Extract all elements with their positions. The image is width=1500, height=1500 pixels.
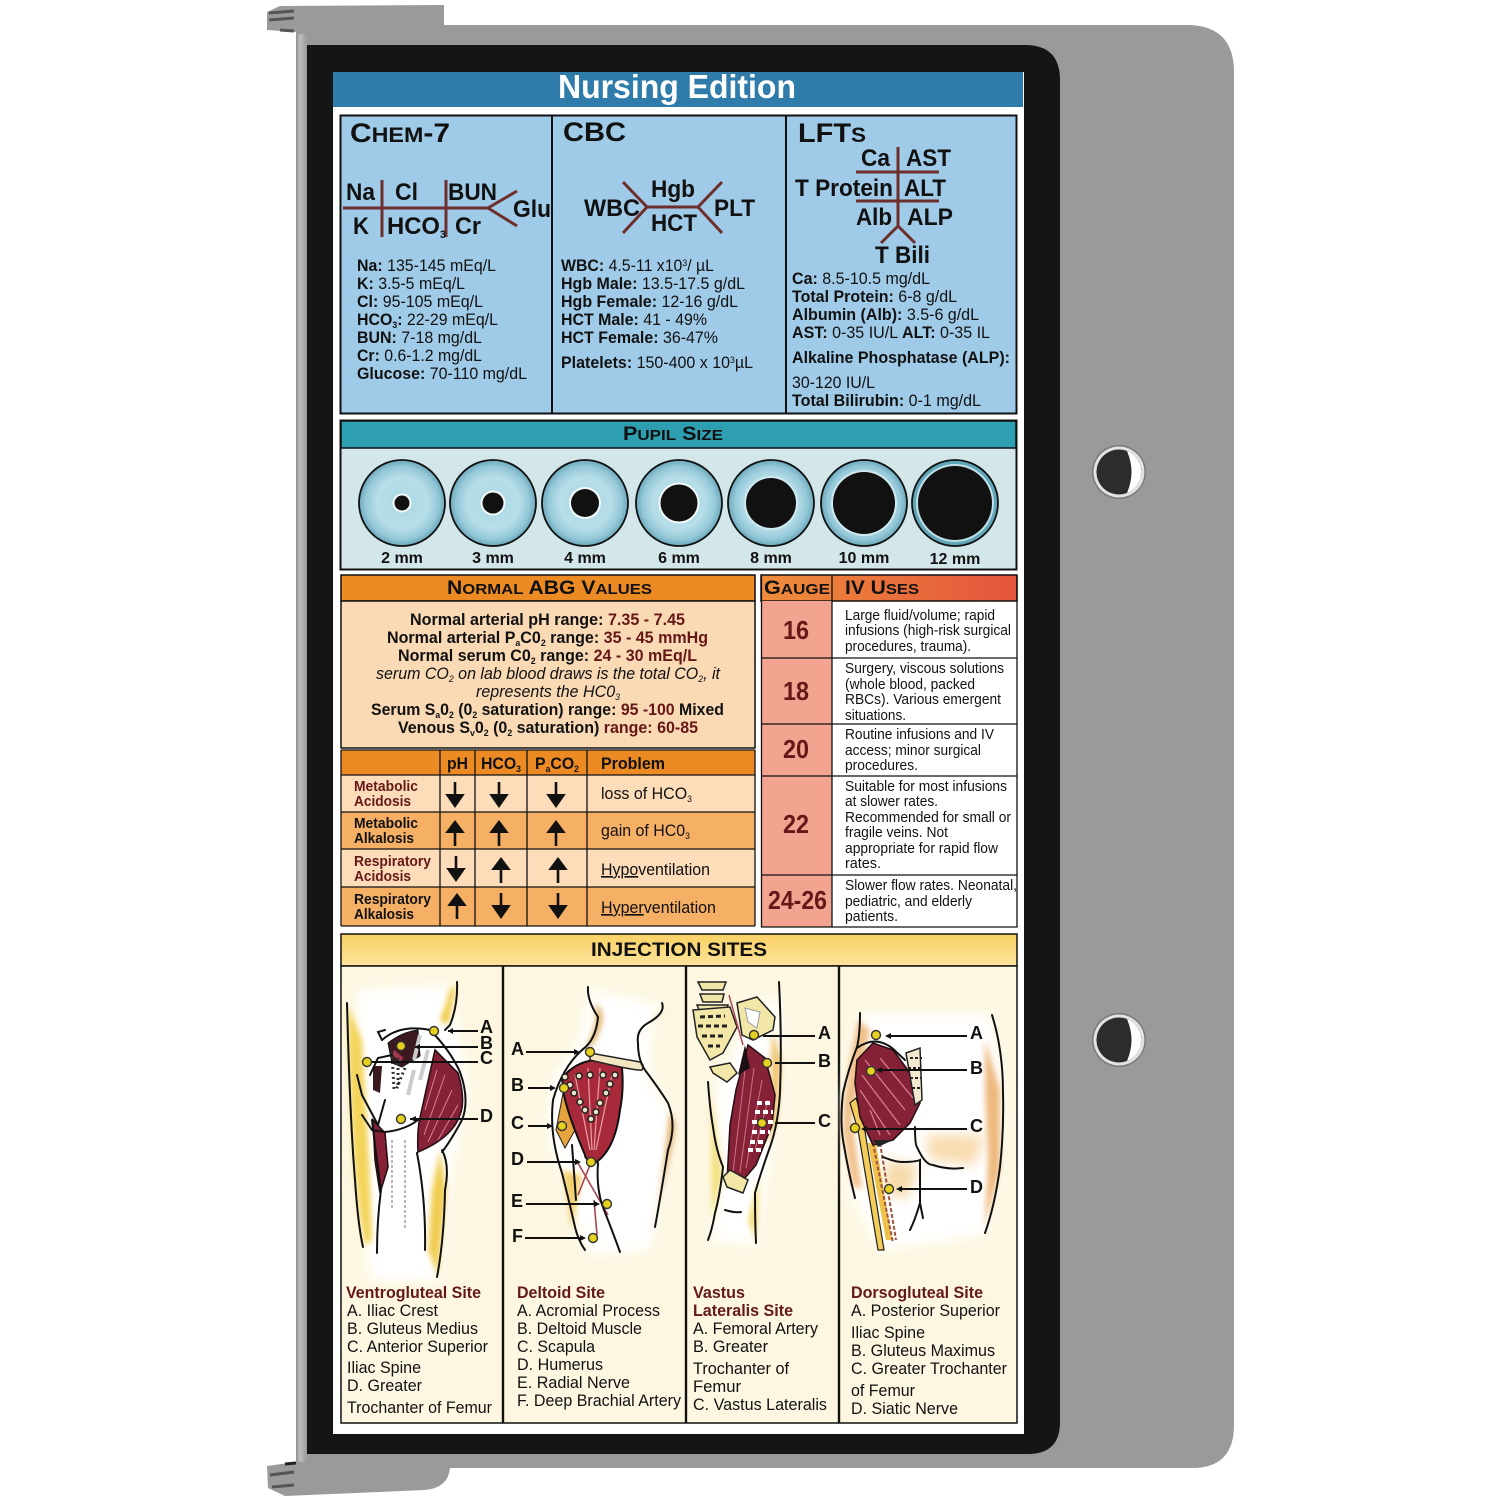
panel: chem-7 — [343, 118, 551, 383]
gauge row 18: Surgery, viscous solutions — [845, 660, 1004, 677]
abg reference text: Normal serum C0 — [398, 647, 535, 665]
gauge row 18: (whole blood, packed — [845, 676, 975, 693]
panel: normal abg values — [341, 575, 755, 926]
panel: chem-7: BUN — [448, 179, 497, 206]
abg table: HCO — [481, 755, 518, 773]
legend: deltoid site — [517, 1283, 681, 1410]
abg reference text: 0 — [440, 701, 449, 719]
panel: gauge and iv uses — [761, 575, 1017, 927]
row: respiratory alkalosis: Alkalosis — [354, 906, 414, 923]
panel: normal abg values: NORMAL ABG V ALUES — [447, 578, 652, 599]
abg reference text: 2 — [507, 728, 512, 738]
row: respiratory acidosis: Hypoventilation — [601, 861, 710, 879]
legend: deltoid site: F. Deep Brachial Artery — [517, 1391, 681, 1410]
illustration: dorsogluteal: D — [970, 1177, 983, 1197]
pupil 6 mm — [636, 460, 722, 567]
panel: cbc: µL — [735, 354, 753, 372]
legend: dorsogluteal site: Iliac Spine — [851, 1323, 925, 1342]
illustration: deltoid — [511, 987, 675, 1255]
legend: vastus lateralis site: Vastus — [693, 1283, 745, 1302]
gauge row 18: RBCs). Various emergent — [845, 691, 1002, 708]
abg reference text: 2 — [531, 656, 536, 666]
pupil 12 mm: 12 mm — [930, 551, 980, 568]
gauge row 16: infusions (high-risk surgical — [845, 622, 1011, 639]
illustration: dorsogluteal: C — [970, 1116, 983, 1136]
row: respiratory alkalosis: Hyperventilation — [601, 899, 716, 917]
panel: lfts: ALP — [907, 204, 953, 231]
illustration: vastus lateralis: A — [818, 1023, 831, 1043]
row: respiratory acidosis: Acidosis — [354, 868, 411, 885]
gauge row 24-26: patients. — [845, 908, 898, 925]
panel: cbc — [561, 117, 755, 372]
panel: chem-7: Glucose: 70-110 mg/dL — [357, 365, 527, 383]
abg reference text: Serum S — [371, 701, 438, 719]
abg reference text: a — [515, 638, 521, 648]
abg table: Problem — [601, 755, 665, 773]
abg reference text: Normal arterial P — [387, 629, 519, 647]
legend: deltoid site: Deltoid Site — [517, 1283, 605, 1302]
row: metabolic acidosis — [354, 778, 692, 810]
abg reference text: (0 — [454, 701, 472, 719]
legend: deltoid site: A. Acromial Process — [517, 1301, 660, 1320]
gauge row 16: 16 — [783, 615, 809, 645]
row: metabolic alkalosis — [354, 815, 690, 847]
pupil 2 mm — [359, 460, 445, 567]
panel: cbc: HCT — [651, 210, 697, 237]
panel: cbc: Hgb — [651, 176, 695, 203]
abg reference text: (0 — [489, 719, 507, 737]
illustration: ventrogluteal: C — [480, 1048, 493, 1068]
illustration: vastus lateralis: C — [818, 1111, 831, 1131]
panel: lfts: ALT — [904, 175, 946, 202]
abg reference text — [371, 611, 724, 738]
pupil 4 mm: 4 mm — [564, 550, 606, 567]
abg reference text: 2 — [484, 728, 489, 738]
legend: deltoid site: C. Scapula — [517, 1337, 595, 1356]
illustration: ventrogluteal — [347, 982, 493, 1280]
row: metabolic alkalosis: gain of HC0 — [601, 822, 688, 840]
illustration: ventrogluteal: D — [480, 1106, 493, 1126]
panel: cbc: 3 — [682, 258, 687, 268]
panel: cbc: Hgb Male: 13.5-17.5 g/dL — [561, 275, 745, 293]
panel: chem-7: Na: 135-145 mEq/L — [357, 257, 496, 275]
legend: dorsogluteal site: B. Gluteus Maximus — [851, 1341, 995, 1360]
legend: vastus lateralis site: Trochanter of — [693, 1359, 789, 1378]
panel: lfts: Total Protein: 6-8 g/dL — [792, 288, 957, 306]
legend: vastus lateralis site: Lateralis Site — [693, 1301, 793, 1320]
panel: labs — [340, 115, 1016, 414]
legend: dorsogluteal site: Dorsogluteal Site — [851, 1283, 983, 1302]
illustration: deltoid: D — [511, 1149, 524, 1169]
abg reference text: Normal arterial pH range: 7.35 - 7.45 — [410, 611, 685, 629]
abg table: pH — [447, 755, 468, 773]
pupil 4 mm — [542, 460, 628, 567]
legend: deltoid site: E. Radial Nerve — [517, 1373, 630, 1392]
panel: chem-7: HCO — [387, 213, 440, 240]
gauge row 22: Suitable for most infusions — [845, 778, 1007, 795]
abg reference text: 2 — [541, 638, 546, 648]
legend: ventrogluteal site: D. Greater — [347, 1376, 422, 1395]
abg reference text: 35 - 45 mmHg — [604, 629, 708, 647]
illustration: deltoid: F — [512, 1226, 523, 1246]
legend: vastus lateralis site — [693, 1283, 827, 1414]
panel: cbc: PLT — [714, 195, 755, 222]
abg reference text: , it — [703, 665, 721, 683]
gauge row 20 — [783, 726, 994, 774]
panel: lfts: Albumin (Alb): 3.5-6 g/dL — [792, 306, 979, 324]
abg table: a — [546, 764, 551, 774]
panel: lfts: AST — [906, 145, 951, 172]
black card frame — [307, 45, 1060, 1454]
legend: ventrogluteal site — [346, 1283, 492, 1417]
panel: lfts — [792, 118, 1010, 410]
row: metabolic alkalosis: 3 — [685, 831, 690, 841]
legend: deltoid site: B. Deltoid Muscle — [517, 1319, 642, 1338]
gauge row 16: procedures, trauma). — [845, 638, 971, 655]
panel: cbc: WBC: 4.5-11 x10 — [561, 257, 686, 275]
abg reference text: Venous S — [398, 719, 472, 737]
legend: dorsogluteal site: D. Siatic Nerve — [851, 1399, 958, 1418]
legend: ventrogluteal site: B. Gluteus Medius — [347, 1319, 478, 1338]
gauge row 16: Large fluid/volume; rapid — [845, 607, 995, 624]
gauge row 20: 20 — [783, 734, 809, 764]
panel: chem-7: 22-29 mEq/L — [407, 311, 502, 329]
row: respiratory alkalosis — [354, 891, 716, 923]
row: respiratory acidosis: Respiratory — [354, 853, 432, 870]
panel: cbc: HCT Female: 36-47% — [561, 329, 718, 347]
gauge row 22: at slower rates. — [845, 793, 938, 810]
abg reference text: 2 — [448, 674, 454, 684]
abg table: CO — [550, 755, 574, 773]
abg table — [341, 750, 755, 926]
abg reference text: range: 60-85 — [604, 719, 698, 737]
panel: cbc: WBC — [584, 195, 640, 222]
gauge row 22: rates. — [845, 855, 881, 872]
panel: pupil size: PUPIL SIZE — [623, 424, 723, 445]
abg reference text: 2 — [449, 710, 454, 720]
panel: chem-7: HCO — [357, 311, 393, 329]
panel: chem-7: Cr: 0.6-1.2 mg/dL — [357, 347, 482, 365]
legend: dorsogluteal site: C. Greater Trochanter — [851, 1359, 1007, 1378]
illustration: deltoid: E — [511, 1191, 523, 1211]
panel: chem-7: Glu — [513, 196, 551, 223]
abg reference text: represents the HC0 — [476, 683, 619, 701]
panel: gauge and iv uses: GAUGE — [764, 578, 830, 599]
panel: cbc: 3 — [730, 355, 735, 365]
clipboard hole top — [1092, 445, 1146, 499]
gauge row 22: appropriate for rapid flow — [845, 840, 998, 857]
panel: chem-7: K — [353, 213, 370, 240]
legend: vastus lateralis site: B. Greater — [693, 1337, 768, 1356]
legend: vastus lateralis site: A. Femoral Artery — [693, 1319, 818, 1338]
panel: lfts: T Bili — [875, 242, 930, 269]
gauge row 22 — [783, 778, 1011, 872]
panel: cbc: HCT Male: 41 - 49% — [561, 311, 707, 329]
gauge row 20: procedures. — [845, 757, 918, 774]
panel: gauge and iv uses: IV U SES — [845, 578, 919, 599]
illustration: deltoid: A — [511, 1039, 524, 1059]
gauge row 18 — [783, 660, 1004, 724]
legend: ventrogluteal site: Iliac Spine — [347, 1358, 421, 1377]
abg reference text: 2 — [472, 710, 477, 720]
illustration: vastus lateralis: B — [818, 1051, 831, 1071]
gauge row 22: 22 — [783, 809, 809, 839]
abg reference text: 0 — [475, 719, 484, 737]
gauge row 16 — [783, 607, 1011, 655]
panel: lfts: Alb — [856, 204, 892, 231]
panel: chem-7: BUN: 7-18 mg/dL — [357, 329, 482, 347]
abg reference text: range: — [536, 647, 594, 665]
clipboard hole bottom — [1092, 1013, 1146, 1067]
panel: lfts: Alkaline Phosphatase (ALP): — [792, 349, 1010, 367]
pupil 10 mm: 10 mm — [839, 550, 889, 567]
abg reference text: 95 -100 Mixed — [621, 701, 726, 719]
row: metabolic alkalosis: Metabolic — [354, 815, 418, 832]
abg reference text: 2 — [697, 674, 703, 684]
pupil 8 mm: 8 mm — [750, 550, 792, 567]
panel: cbc: CBC — [563, 117, 626, 147]
legend: dorsogluteal site: of Femur — [851, 1381, 915, 1400]
pupil 8 mm — [728, 460, 814, 567]
panel: lfts: Ca — [861, 145, 891, 172]
abg reference text: on lab blood draws is the total CO — [454, 665, 698, 683]
panel: injection sites — [341, 934, 1017, 1423]
panel: chem-7: 3 — [440, 229, 446, 241]
panel: lfts: LFTS — [798, 118, 866, 148]
panel: cbc: Platelets: 150-400 x 10 — [561, 354, 733, 372]
gauge row 22: Recommended for small or — [845, 809, 1011, 826]
title bar — [333, 68, 1023, 107]
pupil 6 mm: 6 mm — [658, 550, 700, 567]
panel: lfts: AST: 0-35 IU/L ALT: 0-35 IL — [792, 324, 990, 342]
gauge row 18: 18 — [783, 676, 809, 706]
gauge row 24-26: 24-26 — [768, 885, 827, 915]
white card — [333, 72, 1024, 1434]
legend: dorsogluteal site — [851, 1283, 1007, 1418]
abg reference text: 24 - 30 mEq/L — [594, 647, 697, 665]
illustration: deltoid: C — [511, 1113, 524, 1133]
abg reference text: C0 — [520, 629, 541, 647]
panel: lfts: Total Bilirubin: 0-1 mg/dL — [792, 392, 981, 410]
gauge row 18: situations. — [845, 707, 906, 724]
pupil 10 mm — [821, 460, 907, 567]
panel: chem-7: Na — [346, 179, 376, 206]
illustration: dorsogluteal — [842, 1013, 1003, 1250]
abg reference text: a — [435, 710, 441, 720]
row: metabolic acidosis: 3 — [687, 794, 692, 804]
legend: vastus lateralis site: C. Vastus Lateralis — [693, 1395, 827, 1414]
panel: pupil size — [340, 420, 1016, 570]
gauge row 20: access; minor surgical — [845, 742, 981, 759]
title bar: Nursing Edition — [558, 68, 796, 105]
abg reference text: serum CO — [376, 665, 451, 683]
legend: vastus lateralis site: Femur — [693, 1377, 741, 1396]
panel: chem-7: K: 3.5-5 mEq/L — [357, 275, 465, 293]
panel: lfts: Ca: 8.5-10.5 mg/dL — [792, 270, 930, 288]
row: respiratory alkalosis: Respiratory — [354, 891, 432, 908]
illustration: ventrogluteal: A — [480, 1017, 493, 1037]
pupil 3 mm: 3 mm — [472, 550, 514, 567]
panel: cbc: Hgb Female: 12-16 g/dL — [561, 293, 738, 311]
panel: chem-7: 3 — [392, 320, 397, 330]
panel: chem-7: Cl: 95-105 mEq/L — [357, 293, 483, 311]
panel: chem-7: : — [397, 311, 402, 329]
illustration: dorsogluteal: A — [970, 1023, 983, 1043]
row: respiratory acidosis — [354, 853, 710, 885]
illustration: ventrogluteal: B — [480, 1033, 493, 1053]
panel: injection sites: INJECTION SITES — [591, 940, 767, 961]
abg reference text: 3 — [615, 692, 620, 702]
legend: ventrogluteal site: Ventrogluteal Site — [346, 1283, 481, 1302]
row: metabolic acidosis: Acidosis — [354, 793, 411, 810]
abg reference text: saturation) — [512, 719, 604, 737]
panel: lfts: T Protein — [795, 175, 893, 202]
abg table: 3 — [516, 764, 521, 774]
legend: ventrogluteal site: Trochanter of Femur — [347, 1398, 492, 1417]
row: metabolic acidosis: Metabolic — [354, 778, 418, 795]
panel: chem-7: Cl — [395, 179, 418, 206]
panel: cbc: / µL — [687, 257, 714, 275]
panel: chem-7: Cr — [455, 213, 481, 240]
gauge row 24-26: Slower flow rates. Neonatal, — [845, 877, 1017, 894]
legend: dorsogluteal site: A. Posterior Superior — [851, 1301, 1000, 1320]
row: metabolic acidosis: loss of HCO — [601, 785, 690, 803]
gauge row 22: fragile veins. Not — [845, 824, 949, 841]
legend: ventrogluteal site: C. Anterior Superior — [347, 1337, 488, 1356]
panel: lfts: 30-120 IU/L — [792, 374, 875, 392]
panel: chem-7: CHEM-7 — [350, 118, 450, 148]
abg reference text: saturation) range: — [477, 701, 621, 719]
abg reference text: range: — [546, 629, 604, 647]
row: metabolic alkalosis: Alkalosis — [354, 830, 414, 847]
illustration: deltoid: B — [511, 1075, 524, 1095]
legend: deltoid site: D. Humerus — [517, 1355, 603, 1374]
legend: ventrogluteal site: A. Iliac Crest — [347, 1301, 438, 1320]
gauge row 24-26: pediatric, and elderly — [845, 893, 972, 910]
gauge row 20: Routine infusions and IV — [845, 726, 994, 743]
abg table: P — [535, 755, 546, 773]
abg table: 2 — [574, 764, 579, 774]
abg reference text: v — [470, 728, 475, 738]
illustration: dorsogluteal: B — [970, 1058, 983, 1078]
illustration: vastus lateralis — [693, 982, 831, 1245]
pupil 3 mm — [450, 460, 536, 567]
pupil 12 mm — [912, 460, 998, 568]
gauge row 24-26 — [768, 877, 1017, 925]
clipboard body — [267, 5, 1234, 1496]
pupil 2 mm: 2 mm — [381, 550, 423, 567]
